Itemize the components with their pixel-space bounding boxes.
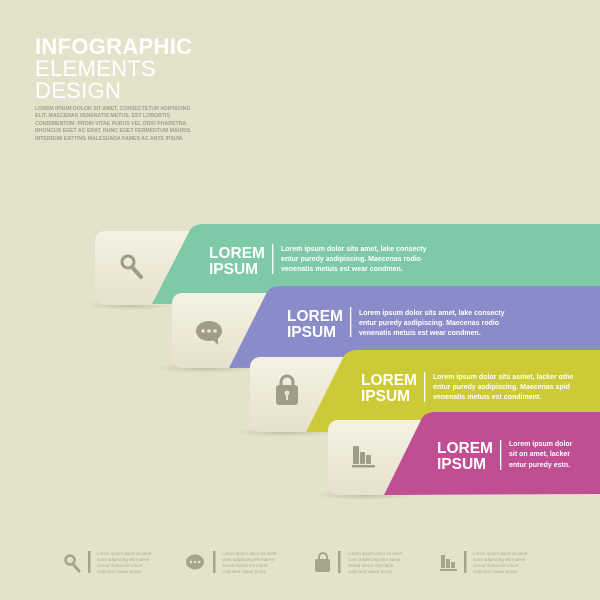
legend: lock: venad metus est lobort (348, 563, 394, 568)
legend: lock: cons adipiscing elit maece (348, 557, 401, 562)
step 3: venenatis metuis est condiment. (433, 394, 541, 401)
step 2 (155, 286, 600, 373)
step 3: IPSUM (361, 388, 410, 405)
step 1 (85, 224, 600, 310)
step 4: LOREM (437, 440, 493, 457)
title: DESIGN (35, 78, 121, 103)
icon: search (122, 256, 141, 277)
legend: lock (315, 551, 403, 574)
legend: chat: Lorem ipsum dolor sit amet (222, 551, 277, 556)
legend: bar chart: codiment vitaee purey (473, 569, 518, 574)
intro text (35, 106, 192, 142)
step 3: entur puredy asdipiscing. Maecenas spid (433, 384, 570, 391)
title: ELEMENTS (35, 56, 156, 81)
legend: bar chart: Lorem ipsum dolor sit amet (473, 551, 528, 556)
intro text: INTERDUM EATTING MALESUADA FAMES AC ANTE IPSUM. (35, 136, 183, 142)
title: INFOGRAPHIC (35, 34, 192, 59)
legend: lock: codiment vitaee purey (348, 569, 393, 574)
legend: chat: cons adipiscing elit maece (222, 557, 275, 562)
title (35, 34, 192, 103)
step 1: IPSUM (209, 261, 258, 278)
step 3: Lorem ipsum dolor sits asmet, lacker othe (433, 374, 574, 381)
legend: chat (186, 551, 277, 574)
intro text: ELIT. MAECENAS VENENATIS METUS. EST LOBORTIS (35, 113, 170, 119)
step 2: entur puredy asdipiscing. Maecenas rodio (359, 320, 499, 327)
intro text: LOREM IPSUM DOLOR SIT AMET, CONSECTETUR ADIPISCING (35, 106, 191, 112)
legend: bar chart: cons adipiscing elit maece (473, 557, 526, 562)
step 1: LOREM (209, 245, 265, 262)
legend: search (66, 551, 152, 574)
legend: search: cons adipiscing elit maece (97, 557, 150, 562)
step 1: Lorem ipsum dolor sits amet, lake consecty (281, 246, 427, 253)
intro text: CONDIMENTUM. PROIN VITAE PURUS VEL ODIO PHARETRA (35, 121, 186, 127)
step 4: entur puredy estn. (509, 462, 570, 469)
legend: search: venad metus est lobort (97, 563, 143, 568)
step 3 (235, 350, 600, 437)
legend: bar chart: venad metus est lobort (473, 563, 519, 568)
step 2: Lorem ipsum dolor sits amet, lake consecty (359, 310, 505, 317)
step 4: IPSUM (437, 456, 486, 473)
legend: search: Lorem ipsum dolor sit amet (97, 551, 152, 556)
step 2: venenatis metuis est wear condmen. (359, 330, 481, 337)
legend: lock: Lorem ipsum dolor sit amet (348, 551, 403, 556)
icon: bar chart (352, 446, 375, 468)
step 4: Lorem ipsum dolor (509, 441, 573, 448)
icon: lock (276, 376, 298, 405)
step 3: LOREM (361, 372, 417, 389)
step 4: sit on amet, lacker (509, 451, 570, 458)
icon: chat (196, 321, 222, 345)
step 2: LOREM (287, 308, 343, 325)
legend: chat: venad metus est lobort (222, 563, 268, 568)
step 1: entur puredy asdipiscing. Maecenas rodio (281, 256, 421, 263)
step 1: venenatis metuis est wear condmen. (281, 266, 403, 273)
intro text: RHONCUS EGET AC ERAT. NUNC EGET FERMENTUM MAURIS. (35, 128, 192, 134)
step 4 (315, 412, 600, 500)
legend: chat: codiment vitaee purey (222, 569, 267, 574)
legend: bar chart (440, 551, 528, 574)
legend: search: codiment vitaee purey (97, 569, 142, 574)
step 2: IPSUM (287, 324, 336, 341)
bottom legend (64, 551, 528, 574)
